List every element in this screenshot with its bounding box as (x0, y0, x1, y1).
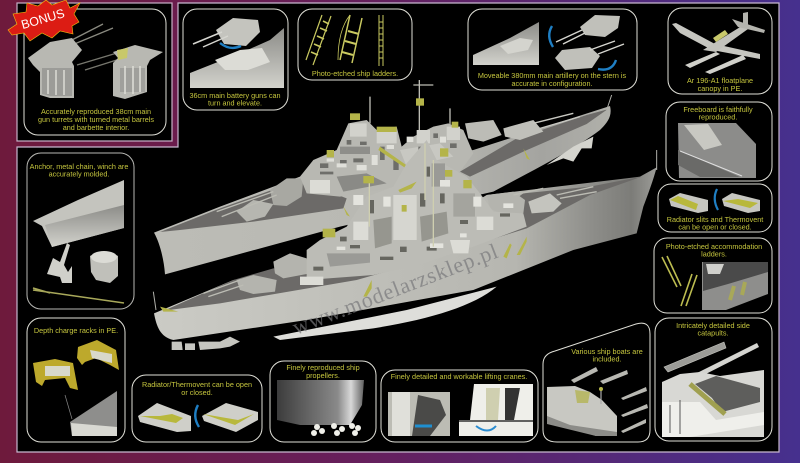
rear forward turrets (217, 113, 580, 222)
caption: Finely reproduced ship (286, 363, 360, 372)
right turret (113, 45, 163, 99)
rack 2 (77, 340, 119, 370)
caption: Intricately detailed side (676, 321, 750, 330)
arrow (195, 405, 199, 427)
vent right (722, 193, 760, 213)
caption: Finely detailed and workable lifting cranes. (391, 372, 527, 381)
hull photo (702, 262, 768, 310)
arrow lower (598, 60, 616, 70)
panel: floatplane (668, 8, 772, 94)
bonus caption: gun turrets with turned metal barrels (38, 115, 154, 124)
caption (683, 105, 753, 122)
caption: Freeboard is faithfully (683, 105, 753, 114)
panel: main battery guns (183, 9, 288, 110)
ladder 1 (306, 15, 331, 65)
chain (33, 288, 124, 303)
rear masts (370, 80, 450, 130)
ladder 2 (338, 15, 362, 63)
caption: reproduced. (699, 112, 737, 122)
caption: 36cm main battery guns can (189, 91, 281, 100)
ships (153, 80, 657, 350)
vent left (138, 403, 191, 432)
caption: Anchor, metal chain, winch are (30, 162, 128, 171)
winch (90, 252, 118, 283)
caption (478, 71, 627, 88)
rear small details (320, 133, 457, 174)
bonus caption (38, 107, 154, 132)
front yellow details (160, 170, 527, 312)
white bottom strip (0, 463, 800, 470)
caption (30, 162, 128, 178)
photo (547, 386, 617, 436)
caption: accurate in configuration. (511, 79, 593, 88)
caption (286, 363, 360, 380)
panel: catapults (655, 318, 772, 441)
front hull (154, 167, 657, 340)
left turret (28, 38, 82, 98)
catapult 2 (691, 343, 759, 380)
caption: turn and elevate. (208, 98, 262, 108)
caption (142, 380, 252, 397)
caption: Radiator/Thermovent can be open (142, 380, 252, 389)
rear ship (154, 80, 611, 274)
front bow tips (153, 95, 657, 310)
caption: Moveable 380mm main artillery on the stern is (478, 71, 627, 80)
caption: propellers. (306, 371, 340, 380)
front keel plate (273, 287, 497, 340)
crane photo right (459, 384, 533, 436)
anchor (47, 243, 72, 283)
deck photo (70, 391, 117, 436)
bonus frame (8, 0, 172, 141)
photo (662, 370, 764, 437)
arrow (715, 189, 718, 210)
arrow upper (549, 26, 553, 47)
caption: or closed. (181, 388, 213, 397)
crane photo left (388, 392, 450, 436)
caption (676, 321, 750, 338)
panel: ship boats (543, 323, 650, 442)
caption: ladders. (701, 250, 727, 258)
bonus starburst: BONUS (20, 6, 66, 32)
panel: depth charge racks (27, 318, 125, 442)
rear superstructure (300, 120, 473, 197)
panel: moveable artillery (468, 9, 637, 90)
caption (667, 215, 763, 232)
panel: propellers (270, 361, 376, 442)
bow image (33, 180, 124, 247)
rear yellow details (327, 98, 530, 170)
rudders and propellers (172, 337, 240, 350)
upper turret (580, 15, 620, 37)
stern photo (277, 380, 364, 425)
caption: Ar 196-A1 floatplane (687, 76, 753, 85)
bonus starburst (8, 0, 80, 41)
ship deck image (190, 28, 284, 88)
panel: ladders (298, 9, 412, 80)
caption: included. (592, 354, 622, 364)
front small details (313, 167, 510, 271)
panel: accommodation ladders (654, 238, 772, 313)
caption (687, 76, 753, 93)
caption (666, 242, 762, 258)
rack 1 (33, 359, 78, 390)
panel: freeboard (666, 102, 772, 181)
rear skeg (547, 137, 593, 165)
propellers (311, 423, 361, 436)
caption: accurately molded. (49, 170, 109, 178)
vent left (669, 193, 708, 213)
ladders (662, 256, 697, 306)
ladder 3 (379, 15, 383, 66)
turret (216, 18, 260, 46)
panel: lifting cranes (381, 370, 538, 442)
panel: anchor (27, 153, 134, 309)
bonus caption: Accurately reproduced 38cm main (41, 107, 151, 116)
caption: Photo-etched accommodation (666, 242, 762, 251)
panel: radiator slits (658, 184, 772, 232)
deck image (678, 123, 756, 178)
front superstructure (307, 140, 527, 280)
plane (672, 12, 765, 74)
right turret barrels (77, 53, 123, 70)
rear deck (160, 180, 347, 232)
caption: canopy in PE. (698, 84, 742, 93)
vent right (202, 403, 258, 432)
front deck (164, 177, 642, 311)
left turret barrels (68, 24, 113, 45)
front mast (369, 143, 433, 247)
watermark: www.modelarzsklep.pl (289, 238, 502, 340)
barrels (193, 32, 228, 47)
caption: Radiator slits and Thermovent (667, 215, 763, 224)
caption: catapults. (697, 328, 729, 338)
ship stern image (473, 22, 539, 65)
caption: Depth charge racks in PE. (34, 326, 118, 335)
caption (571, 347, 643, 364)
front ship (153, 95, 657, 340)
panel: radiator open or closed (132, 375, 262, 442)
caption: Photo-etched ship ladders. (312, 69, 398, 78)
rear hull (154, 106, 611, 274)
boats (571, 367, 648, 433)
catapult 1 (664, 342, 726, 372)
panel: bonus turrets (24, 9, 166, 135)
rotation arrow (220, 43, 241, 48)
bonus caption: and barbette interior. (63, 123, 129, 132)
caption: can be open or closed. (678, 222, 752, 232)
caption: Various ship boats are (571, 347, 643, 356)
lower turret (555, 47, 600, 70)
caption (189, 91, 281, 108)
front turrets (203, 187, 597, 297)
